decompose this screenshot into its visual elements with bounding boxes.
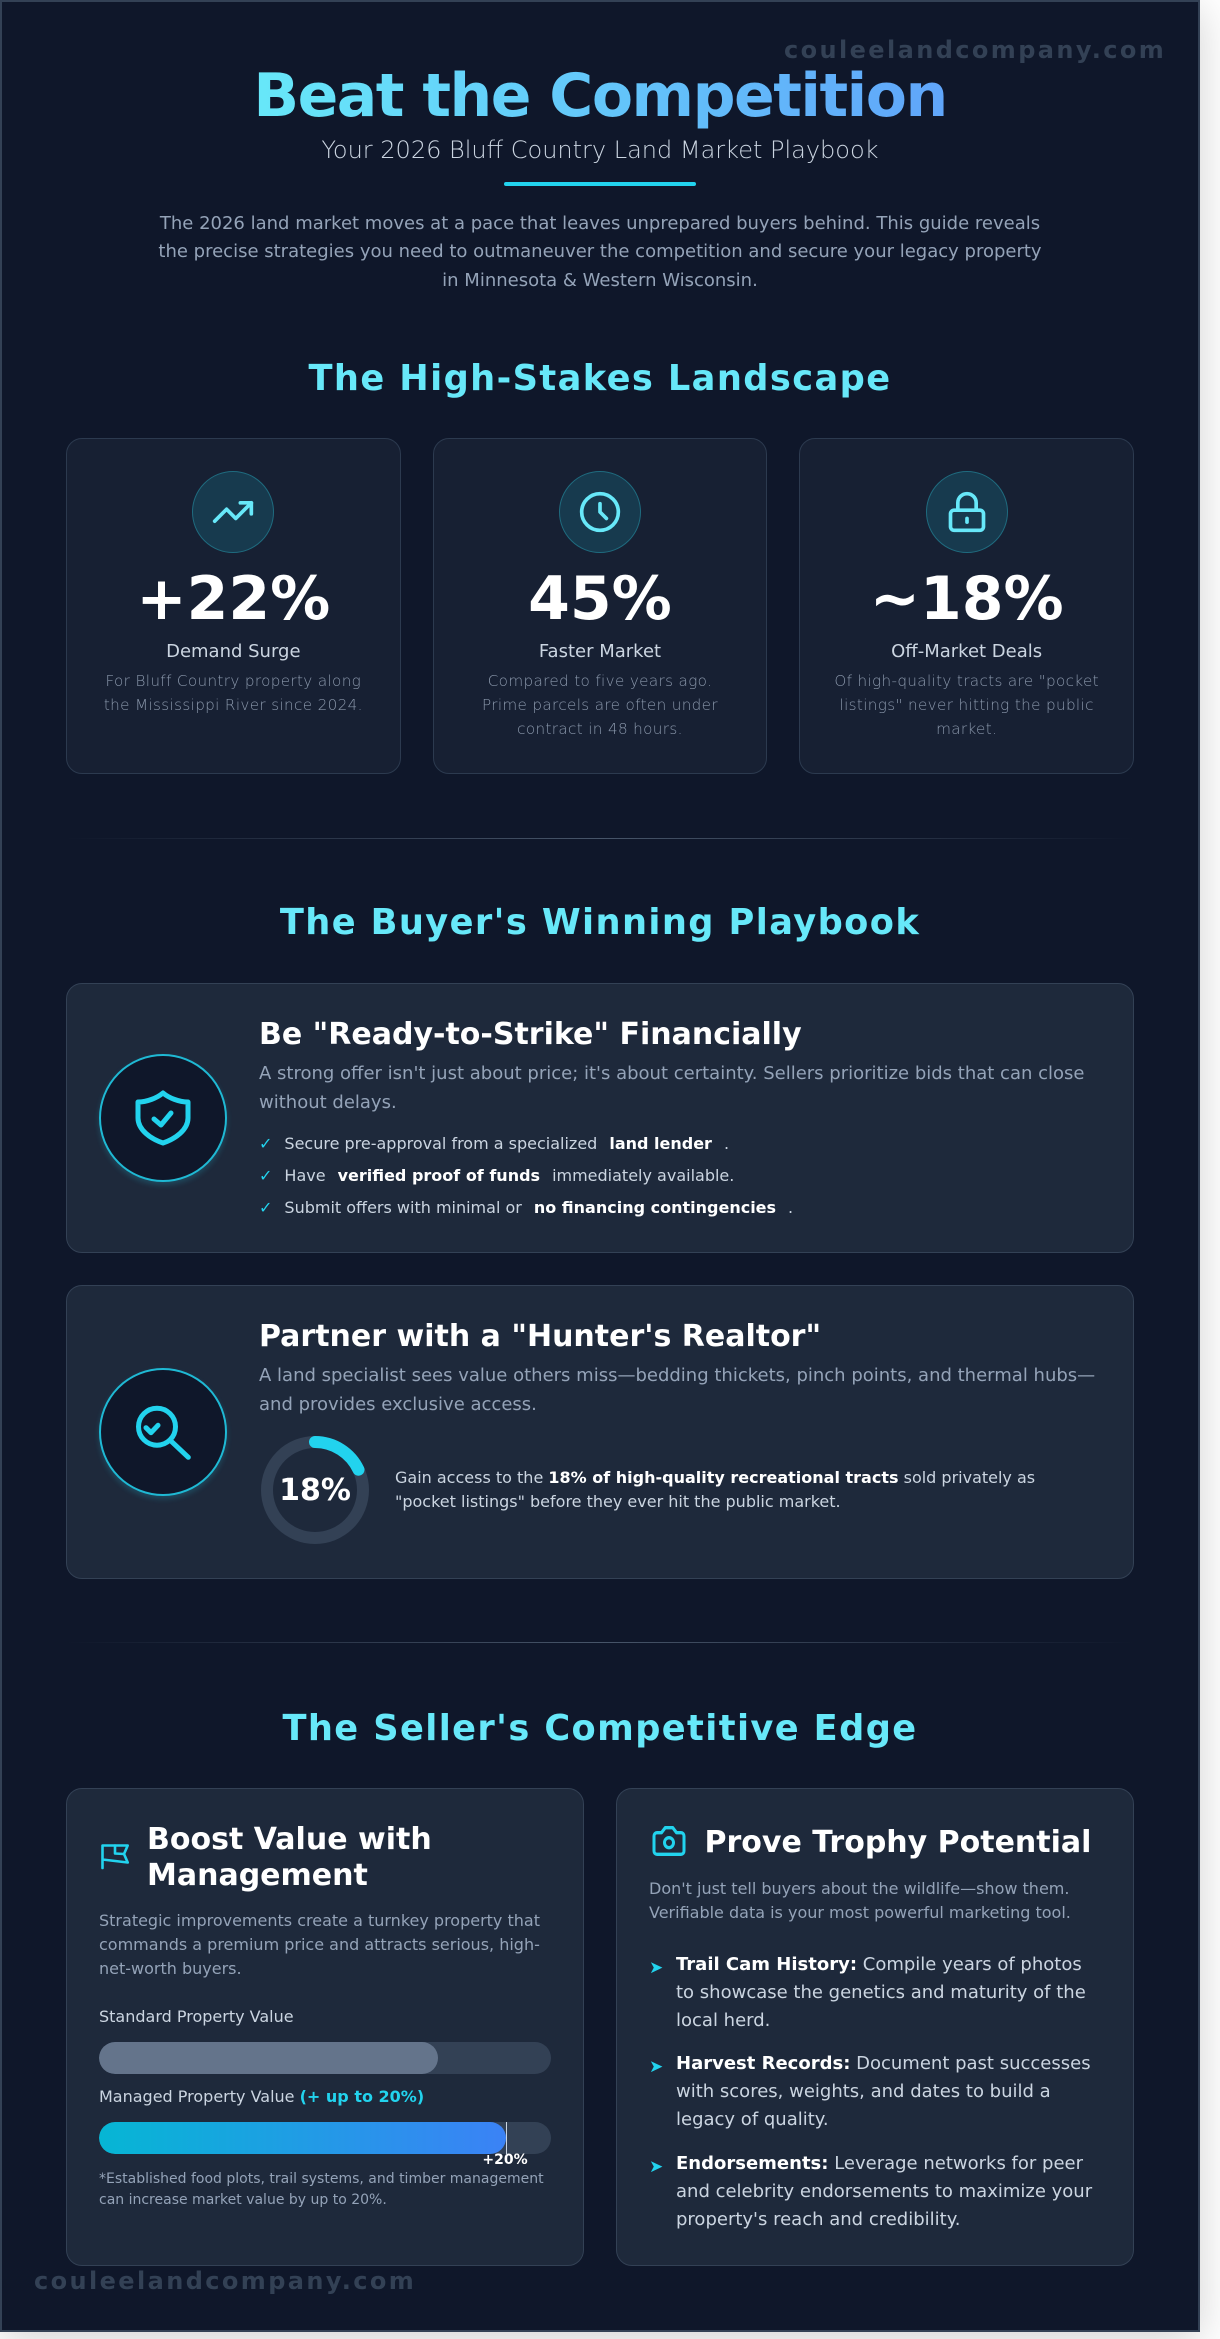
bar: managed value 90% [99, 2122, 551, 2154]
icon: search check [99, 1368, 227, 1496]
footnote [99, 2171, 544, 2208]
stat number: 45% [528, 564, 672, 634]
checklist item: verified proof of funds [338, 1166, 540, 1184]
panel title [147, 1822, 432, 1892]
feature title: Be "Ready-to-Strike" Financially [259, 1016, 802, 1052]
checklist item: no financing contingencies [534, 1198, 776, 1216]
stat description: market. [936, 720, 997, 738]
donut caption: Gain access to the 18% of high-quality recreational tracts sold privately as [395, 1468, 1035, 1487]
checklist item: ✓ [259, 1134, 272, 1152]
checklist item: Have [284, 1166, 326, 1184]
panel text [649, 1879, 1071, 1922]
stat description [834, 672, 1099, 738]
feature text [259, 1063, 1084, 1113]
bar: standard value 75% [99, 2042, 551, 2074]
donut chart: 18% [261, 1436, 369, 1544]
feature card: hunter's realtor [66, 1285, 1134, 1579]
intro paragraph [158, 213, 1042, 291]
stat card: faster market [433, 438, 767, 774]
bullet arrow: ➤ [649, 2057, 663, 2077]
feature card: ready to strike [66, 983, 1134, 1253]
checklist item: ✓ [259, 1198, 272, 1216]
panel text: Don't just tell buyers about the wildlife—show them. [649, 1879, 1069, 1898]
icon: trending up [192, 471, 274, 553]
footnote: can increase market value by up to 20%. [99, 2192, 387, 2208]
title: Beat the Competition [253, 61, 947, 131]
stat description: the Mississippi River since 2024. [104, 696, 363, 714]
subtitle: Your 2026 Bluff Country Land Market Playbook [321, 136, 879, 164]
checklist item: Secure pre-approval from a specialized [284, 1134, 597, 1152]
panel text: Verifiable data is your most powerful marketing tool. [649, 1903, 1071, 1922]
feature text [259, 1365, 1095, 1415]
stat description: contract in 48 hours. [517, 720, 683, 738]
panel text: Strategic improvements create a turnkey property that [99, 1911, 540, 1930]
footnote: *Established food plots, trail systems, and timber management [99, 2171, 544, 2187]
stat description: For Bluff Country property along [106, 672, 361, 690]
intro paragraph: The 2026 land market moves at a pace that leaves unprepared buyers behind. This guide reveals [160, 213, 1040, 234]
bullet text: Trail Cam History: Compile years of photos [676, 1954, 1082, 1974]
stat label: Faster Market [539, 640, 661, 662]
panel: boost value [66, 1788, 584, 2266]
heading: buyer's winning playbook: The Buyer's Winning Playbook [280, 902, 920, 943]
stat description [104, 672, 363, 714]
bullet text [676, 1954, 1086, 2031]
panel: trophy potential [616, 1788, 1134, 2266]
checklist item [259, 1166, 734, 1184]
watermark: top right: couleelandcompany.com [784, 36, 1166, 64]
stat description [482, 672, 718, 738]
stat label: Off-Market Deals [891, 640, 1042, 662]
bullet text: Harvest Records: Document past successes [676, 2053, 1091, 2074]
panel text [99, 1911, 540, 1978]
stat number: ~18% [870, 564, 1064, 634]
bullet text: property's reach and credibility. [676, 2209, 961, 2230]
checklist item [259, 1198, 793, 1216]
stat number: +22% [136, 564, 330, 634]
donut caption [395, 1468, 1035, 1511]
checklist item: Submit offers with minimal or [284, 1198, 522, 1216]
bullet text: and celebrity endorsements to maximize your [676, 2181, 1092, 2202]
intro paragraph: the precise strategies you need to outmaneuver the competition and secure your legacy property [158, 241, 1042, 262]
bullet text: legacy of quality. [676, 2109, 829, 2130]
checklist item: . [788, 1198, 793, 1216]
stat card: demand surge [66, 438, 401, 774]
checklist item: immediately available. [552, 1166, 734, 1184]
bullet arrow: ➤ [649, 1958, 663, 1978]
feature title: Partner with a "Hunter's Realtor" [259, 1318, 821, 1354]
donut caption: "pocket listings" before they ever hit the public market. [395, 1492, 841, 1511]
checklist item: land lender [609, 1134, 712, 1152]
heading: seller's competitive edge: The Seller's Competitive Edge [282, 1708, 918, 1748]
panel title: Boost Value with [147, 1822, 432, 1856]
panel text: net-worth buyers. [99, 1959, 242, 1978]
stat description: listings" never hitting the public [840, 696, 1094, 714]
icon: shield check [99, 1054, 227, 1182]
panel title: Management [147, 1858, 368, 1892]
stat description: Of high-quality tracts are "pocket [834, 672, 1099, 690]
panel text: commands a premium price and attracts serious, high- [99, 1935, 540, 1954]
panel title: Prove Trophy Potential [704, 1824, 1091, 1860]
title accent bar [504, 182, 696, 186]
bullet text: Endorsements: Leverage networks for peer [676, 2152, 1083, 2174]
bar marker label: +20% [482, 2152, 528, 2168]
bullet text: to showcase the genetics and maturity of the [676, 1982, 1086, 2003]
bullet text [676, 2152, 1092, 2230]
bar label: standard: Standard Property Value [99, 2006, 294, 2026]
bullet: trail cam history [649, 1954, 1086, 2031]
feature text: A land specialist sees value others miss—bedding thickets, pinch points, and thermal hubs— [259, 1365, 1095, 1386]
checklist item: . [724, 1134, 729, 1152]
donut value: 18% [279, 1473, 351, 1508]
bullet: harvest records [649, 2053, 1091, 2130]
icon: flag [101, 1844, 129, 1870]
stat description: Compared to five years ago. [488, 672, 712, 690]
bullet: endorsements [649, 2152, 1092, 2230]
watermark: bottom left: couleelandcompany.com [34, 2267, 416, 2295]
checklist item [259, 1134, 729, 1152]
checklist item: ✓ [259, 1166, 272, 1184]
bullet arrow: ➤ [649, 2156, 663, 2176]
intro paragraph: in Minnesota & Western Wisconsin. [442, 270, 758, 291]
feature text: without delays. [259, 1092, 397, 1113]
bar label: managed: Managed Property Value (+ up to 20%) [99, 2086, 424, 2106]
feature text: A strong offer isn't just about price; it's about certainty. Sellers prioritize bids that can close [259, 1063, 1084, 1084]
stat card: off-market deals [799, 438, 1134, 774]
icon: camera [652, 1826, 686, 1856]
icon: lock [926, 471, 1008, 553]
stat label: Demand Surge [166, 640, 301, 662]
feature text: and provides exclusive access. [259, 1394, 537, 1415]
bullet text: local herd. [676, 2010, 770, 2031]
stat description: Prime parcels are often under [482, 696, 718, 714]
icon: clock [559, 471, 641, 553]
bullet text: with scores, weights, and dates to build a [676, 2081, 1051, 2102]
bullet text [676, 2053, 1091, 2130]
heading: high-stakes landscape: The High-Stakes Landscape [309, 358, 891, 398]
